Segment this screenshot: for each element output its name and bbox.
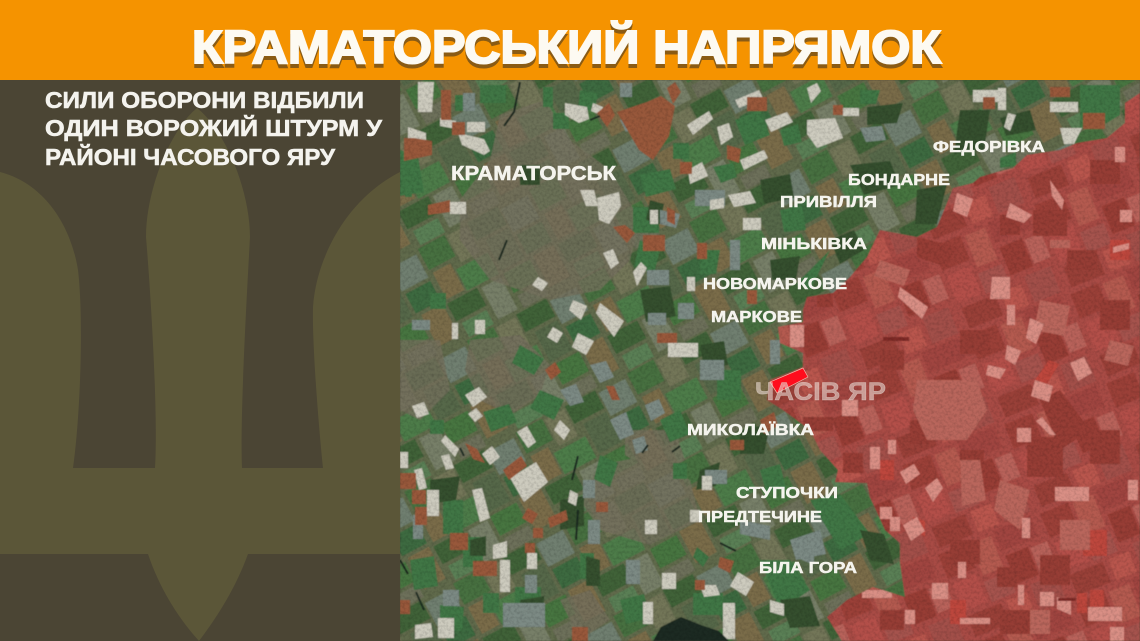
label: Bondarne: БОНДАРНЕ	[848, 172, 950, 189]
label: Bila Hora: БІЛА ГОРА	[759, 560, 858, 577]
map: grey-blue fields	[412, 83, 886, 627]
label: Stupochky: СТУПОЧКИ	[736, 485, 838, 502]
trident emblem	[0, 108, 400, 641]
map: rivers and ponds	[400, 82, 736, 610]
map: dark green fields	[430, 103, 1036, 628]
left panel background	[0, 80, 400, 641]
map: white fields	[400, 82, 1082, 639]
satellite map	[400, 80, 1140, 641]
red marker: advance arrow at Chasiv Yar	[770, 368, 808, 393]
label: Kramatorsk: КРАМАТОРСЬК	[451, 163, 617, 185]
title shadow: КРАМАТОРСЬКИЙ НАПРЯМОК	[192, 25, 942, 77]
map labels	[451, 139, 1046, 577]
label: Markove: МАРКОВЕ	[711, 309, 802, 326]
map: occupied red territory	[767, 93, 1140, 641]
label: Minkivka: МІНЬКІВКА	[761, 236, 868, 253]
label: Pryvillia: ПРИВІЛЛЯ	[780, 194, 877, 211]
title: КРАМАТОРСЬКИЙ НАПРЯМОК	[192, 21, 942, 73]
label: Predtechyne: ПРЕДТЕЧИНЕ	[698, 509, 822, 526]
side text: defence forces repelled one assault	[45, 87, 383, 170]
map: satellite grain	[400, 80, 1140, 641]
header banner	[0, 0, 1140, 80]
map: brown fields	[400, 82, 1105, 641]
label: Fedorivka: ФЕДОРІВКА	[933, 139, 1046, 156]
side text: defence forces repelled one assault: СИЛИ ОБОРОНИ ВІДБИЛИ	[45, 87, 364, 113]
label: Chasiv Yar: ЧАСІВ ЯР	[755, 378, 886, 406]
map: red territory field patches	[790, 147, 1138, 641]
map: urban areas	[400, 100, 700, 640]
label: Novomarkove: НОВОМАРКОВЕ	[703, 276, 847, 293]
label: Mykolaivka: МИКОЛАЇВКА	[687, 421, 815, 439]
map: lake	[653, 617, 729, 641]
map: green fields	[400, 85, 1120, 631]
side text: defence forces repelled one assault: РАЙОНІ ЧАСОВОГО ЯРУ	[45, 143, 336, 170]
side text: defence forces repelled one assault: ОДИН ВОРОЖИЙ ШТУРМ У	[45, 114, 383, 141]
